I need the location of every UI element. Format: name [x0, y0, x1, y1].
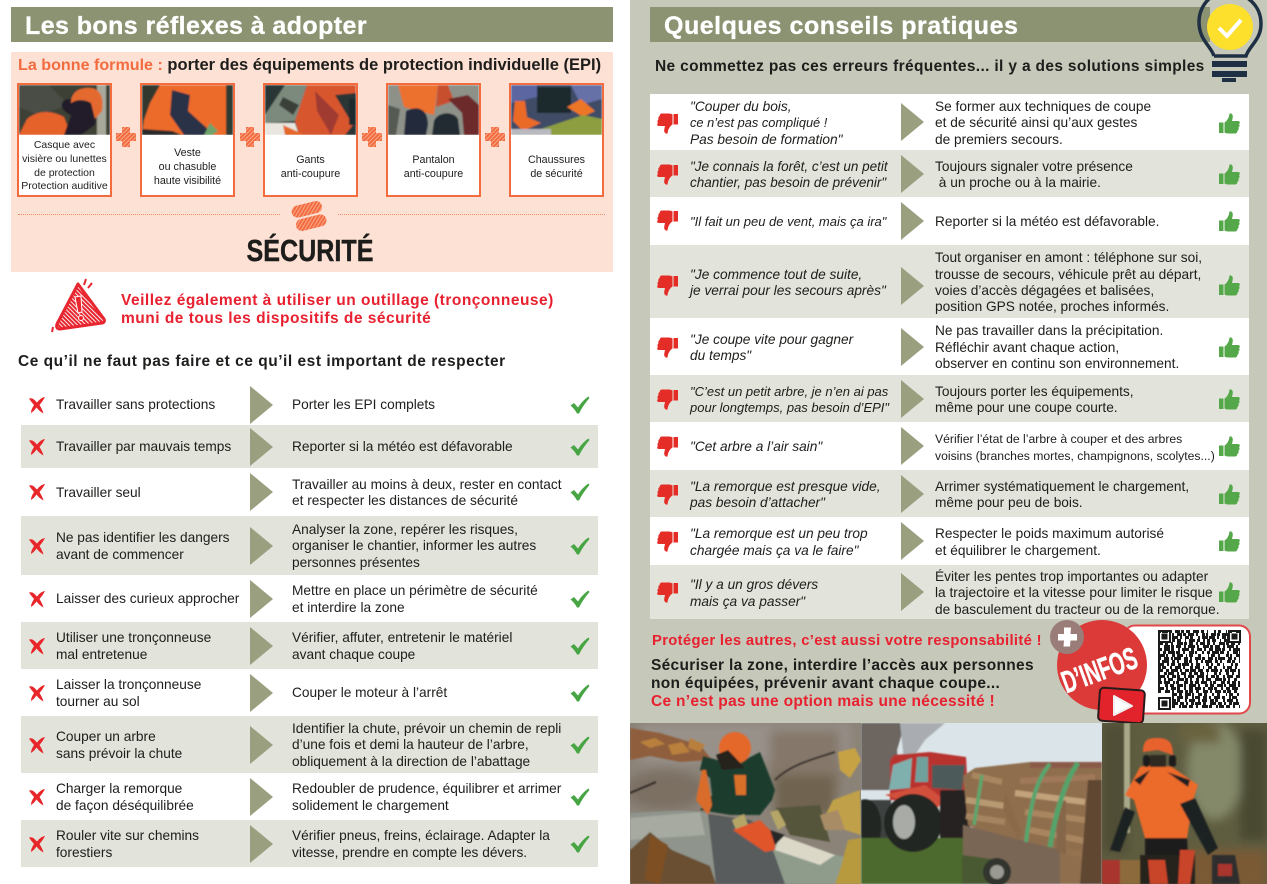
thumb up: [1219, 274, 1240, 296]
quote: mais ça va passer": [690, 594, 805, 608]
text block: sécuriser la zone: non équipées, prévenir avant chaque coupe...: [651, 675, 1000, 692]
caption: casque: [21, 139, 108, 192]
solution: Toujours signaler votre présence: [935, 159, 1133, 174]
plus 3: [362, 127, 382, 147]
caption: veste: ou chasuble: [159, 161, 216, 173]
quote: [690, 473, 881, 517]
quote: "Couper du bois,: [690, 99, 792, 114]
row 9: [21, 773, 598, 820]
thumb up: [1219, 484, 1240, 504]
callout: protéger les autres: Protéger les autres, c’est aussi votre responsabilité !: [652, 633, 1042, 649]
mistake: Laisser la tronçonneuse: [56, 677, 201, 692]
plus 2: [240, 127, 260, 147]
check: [570, 538, 590, 554]
row 8: [21, 716, 598, 773]
check: [570, 736, 590, 754]
thumb up: [1219, 164, 1240, 184]
mistake: Rouler vite sur chemins: [56, 828, 199, 843]
arrow: [901, 474, 924, 512]
mistake: Utiliser une tronçonneuse: [56, 630, 211, 645]
remedy: Analyser la zone, repérer les risques,: [292, 522, 518, 537]
remedy: Couper le moteur à l’arrêt: [292, 685, 447, 700]
photo: bûcheron à la tronçonneuse: [630, 723, 861, 884]
cross: [29, 439, 45, 456]
check: [570, 684, 590, 702]
arrow: [250, 626, 273, 664]
play button: [1098, 688, 1145, 724]
row 7: [21, 669, 598, 716]
solution: position GPS notée, proches informés.: [935, 299, 1169, 314]
advice 2: [650, 150, 1249, 197]
photo: chaussures: [511, 85, 602, 135]
solution: et de sécurité ainsi qu’aux gestes: [935, 115, 1137, 130]
cross: [28, 736, 46, 754]
thumb up: [1219, 336, 1240, 358]
solution: [935, 425, 1215, 470]
quote: "Il fait un peu de vent, mais ça ira": [690, 214, 886, 229]
row 1: [21, 385, 598, 425]
solution: Vérifier l’état de l’arbre à couper et des arbres: [935, 432, 1182, 446]
QR finder squares: [1159, 631, 1240, 709]
advice 3: [650, 197, 1249, 245]
remedy: [292, 718, 561, 773]
remedy: personnes présentes: [292, 555, 420, 570]
solution: même pour une coupe courte.: [935, 400, 1118, 415]
check: [570, 590, 590, 608]
row 6: [21, 622, 598, 669]
solution: [935, 473, 1189, 517]
caption: gants: anti-coupure: [281, 168, 340, 180]
remedy: solidement le chargement: [292, 798, 449, 812]
photo: tracteur et remorque de bois: [861, 723, 1102, 884]
heading: Quelques conseils pratiques: [650, 7, 1210, 42]
mistake: Couper un arbre: [56, 729, 156, 744]
plus sign: [1058, 628, 1077, 646]
quote: [690, 378, 889, 422]
row 4: [21, 516, 598, 575]
solution: Toujours porter les équipements,: [935, 384, 1134, 399]
text block: sécuriser la zone: Ce n’est pas une option mais une nécessité !: [651, 693, 995, 710]
caption: casque: Casque avec: [34, 139, 95, 151]
quote: [690, 520, 868, 565]
solution: Arrimer systématiquement le chargement,: [935, 479, 1189, 494]
mistake: mal entretenue: [56, 646, 147, 662]
caption: chaussures: [528, 154, 585, 180]
advice 1: [650, 94, 1249, 150]
caption: casque: de protection: [34, 166, 95, 178]
solution: Éviter les pentes trop importantes ou adapter: [935, 569, 1208, 584]
solution: voisins (branches mortes, champignons, scolytes...): [935, 448, 1215, 462]
quote: "Je connais la forêt, c’est un petit: [690, 159, 888, 174]
remedy: Mettre en place un périmètre de sécurité: [292, 583, 538, 598]
arrow: [250, 580, 273, 618]
quote: [690, 321, 853, 375]
advice 4: [650, 245, 1249, 318]
card: gants: [263, 83, 358, 197]
solution: [935, 153, 1133, 197]
remedy: [292, 775, 561, 820]
quote: [690, 97, 842, 150]
check: [570, 484, 590, 500]
panel: la bonne formule: [11, 52, 613, 272]
icon: warning triangle: [51, 278, 106, 332]
remedy: obliquement à la direction de l’abattage: [292, 754, 530, 769]
row 10: [21, 820, 598, 867]
callout: outillage: muni de tous les dispositifs de sécurité: [121, 310, 431, 327]
advice 9: [650, 517, 1249, 565]
remedy: Vérifier, affuter, entretenir le matériel: [292, 630, 512, 645]
cross: [29, 397, 45, 414]
thumb up: [1219, 113, 1240, 134]
caption: casque: visière ou lunettes: [22, 153, 107, 165]
arrow: [250, 726, 273, 764]
plus disc: [1050, 620, 1084, 654]
solution: la trajectoire et la vitesse pour limiter le risque: [935, 585, 1213, 600]
solution: Reporter si la météo est défavorable.: [935, 214, 1159, 229]
thumb down: [657, 582, 678, 603]
arrow: [901, 328, 924, 366]
mistake: [56, 822, 199, 867]
arrow: [250, 473, 273, 511]
arrow: [901, 202, 924, 240]
row 5: [21, 575, 598, 622]
photo: veste: [142, 85, 233, 135]
remedy: [292, 822, 550, 867]
icon: equals sign: [292, 201, 326, 231]
thumb down: [657, 210, 678, 231]
plus 1: [116, 127, 136, 147]
arrow: [901, 103, 924, 141]
row 3: [21, 468, 598, 516]
check: [570, 834, 590, 852]
photo: pantalon: [388, 85, 479, 135]
thumb down: [657, 164, 678, 184]
quote: "La remorque est un peu trop: [690, 526, 868, 541]
thumb down: [657, 531, 678, 552]
red circle: [1057, 620, 1147, 710]
mistake: Travailler sans protections: [56, 397, 215, 412]
caption: pantalon: Pantalon: [412, 154, 455, 166]
photo: bûcheron de dos: [1102, 723, 1267, 884]
solution: Tout organiser en amont : téléphone sur soi,: [935, 250, 1202, 265]
mistake: tourner au sol: [56, 694, 140, 708]
arrow: [901, 573, 924, 611]
arrow: [250, 386, 273, 424]
arrow: [250, 824, 273, 862]
caption: gants: [281, 154, 340, 180]
quote: pour longtemps, pas besoin d’EPI": [690, 400, 889, 415]
solution: trousse de secours, véhicule prêt au départ,: [935, 267, 1201, 282]
solution: Ne pas travailler dans la précipitation.: [935, 323, 1163, 338]
solution: observer en continu son environnement.: [935, 356, 1179, 371]
mistake: de façon déséquilibrée: [56, 798, 194, 812]
remedy: Travailler au moins à deux, rester en contact: [292, 477, 562, 492]
photo: gants: [265, 85, 356, 135]
arrow: [250, 428, 273, 466]
arrow: [250, 674, 273, 712]
mistake: [56, 775, 194, 820]
card: pantalon: [386, 83, 481, 197]
cross: [28, 834, 46, 852]
quote: ce n’est pas compliqué !: [690, 115, 827, 130]
mistake: forestiers: [56, 844, 112, 860]
solution: [935, 568, 1220, 619]
quote: Pas besoin de formation": [690, 132, 842, 147]
thumb down: [657, 388, 678, 410]
quote: "La remorque est presque vide,: [690, 479, 881, 494]
cross: [28, 788, 46, 806]
check: [570, 438, 590, 456]
D'INFOS label: D’INFOS: [1057, 640, 1142, 700]
thumb down: [657, 113, 678, 134]
remedy: Vérifier pneus, freins, éclairage. Adapter la: [292, 828, 550, 843]
remedy: Identifier la chute, prévoir un chemin de repli: [292, 721, 561, 736]
mistake: [56, 718, 182, 773]
caption: veste: Veste: [174, 147, 201, 159]
remedy: organiser le chantier, informer les autres: [292, 538, 536, 553]
arrow: [901, 380, 924, 418]
callout: outillage: [121, 292, 554, 327]
caption: veste: haute visibilité: [154, 175, 221, 187]
card: veste: [140, 83, 235, 197]
advice 8: [650, 470, 1249, 517]
remedy: [292, 583, 538, 614]
cross: [28, 684, 46, 702]
heading: la bonne formule: La bonne formule : porter des équipements de protection individuelle (EPI): [18, 56, 601, 74]
quote: "Il y a un gros dévers: [690, 577, 818, 592]
remedy: et interdire la zone: [292, 600, 405, 614]
check: [570, 636, 590, 654]
plus 4: [485, 127, 505, 147]
heading: Les bons réflexes à adopter: Les bons réflexes à adopter: [25, 12, 367, 40]
remedy: [292, 522, 536, 570]
quote: je verrai pour les secours après": [690, 283, 886, 298]
quote: chargée mais ça va le faire": [690, 542, 858, 558]
remedy: et respecter les distances de sécurité: [292, 493, 518, 508]
quote: [690, 568, 818, 619]
card: casque: [17, 83, 112, 197]
caption: chaussures: Chaussures: [528, 154, 585, 166]
thumb down: [657, 436, 678, 457]
remedy: avant chaque coupe: [292, 646, 415, 662]
remedy: Reporter si la météo est défavorable: [292, 439, 513, 454]
text block: sécuriser la zone: [651, 657, 1034, 711]
thumb up: [1219, 436, 1240, 457]
solution: [935, 321, 1179, 375]
thumb down: [657, 336, 678, 358]
caption: gants: Gants: [296, 154, 325, 166]
mistake: avant de commencer: [56, 546, 184, 562]
arrow: [901, 266, 924, 304]
remedy: vitesse, prendre en compte les dévers.: [292, 844, 527, 860]
mistake: Charger la remorque: [56, 781, 182, 796]
solution: à un proche ou à la mairie.: [939, 175, 1101, 190]
thumb up: [1219, 582, 1240, 603]
dotted line left: [18, 214, 280, 215]
text block: sécuriser la zone: Sécuriser la zone, interdire l’accès aux personnes: [651, 657, 1034, 674]
arrow: [901, 427, 924, 465]
mistake: Ne pas identifier les dangers: [56, 530, 229, 545]
thumb up: [1219, 388, 1240, 410]
mistake: sans prévoir la chute: [56, 746, 182, 760]
advice 5: [650, 318, 1249, 375]
check: [570, 396, 590, 414]
quote: chantier, pas besoin de prévenir": [690, 175, 886, 190]
right panel background: [630, 0, 1267, 884]
advice 6: [650, 375, 1249, 422]
solution: Réfléchir avant chaque action,: [935, 340, 1119, 355]
remedy: Porter les EPI complets: [292, 397, 435, 412]
quote: "Cet arbre a l’air sain": [690, 439, 822, 454]
caption: pantalon: anti-coupure: [404, 168, 463, 180]
solution: Se former aux techniques de coupe: [935, 99, 1151, 114]
advice 10: [650, 565, 1249, 619]
thumb up: [1219, 531, 1240, 552]
QR frame: [1124, 626, 1250, 714]
cross: [29, 591, 45, 608]
thumb down: [657, 484, 678, 504]
remedy: d’une fois et demi la hauteur de l’arbre,: [292, 737, 529, 752]
caption: pantalon: [404, 154, 463, 180]
mistake: [56, 630, 211, 662]
arrow: [901, 154, 924, 192]
arrow: [901, 522, 924, 560]
quote: [690, 248, 886, 318]
play triangle: [1114, 696, 1132, 715]
solution: de basculement du tracteur ou de la remorque.: [935, 602, 1220, 617]
caption: veste: [154, 147, 221, 187]
heading: erreurs fréquentes: Ne commettez pas ces erreurs fréquentes... il y a des solutions simples: [655, 58, 1205, 75]
heading: ce qu'il ne faut pas faire: Ce qu’il ne faut pas faire et ce qu’il est important de respecter: [18, 353, 506, 370]
mistake: [56, 671, 201, 716]
quote: pas besoin d’attacher": [690, 495, 825, 510]
cross: [29, 538, 45, 554]
mistake: Travailler seul: [56, 485, 141, 500]
solution: et équilibrer le chargement.: [935, 542, 1101, 558]
caption: casque: Protection auditive: [21, 180, 108, 192]
solution: [935, 378, 1134, 422]
quote: du temps": [690, 348, 751, 363]
card: chaussures: [509, 83, 604, 197]
dotted line right: [338, 214, 605, 215]
solution: [935, 520, 1164, 565]
solution: de premiers secours.: [935, 132, 1063, 147]
cross: [29, 484, 45, 500]
solution: même pour peu de bois.: [935, 495, 1083, 510]
check: [570, 788, 590, 806]
quote: "Je commence tout de suite,: [690, 267, 862, 282]
icon: light bulb: [1197, 0, 1267, 84]
QR code: [1158, 632, 1240, 706]
remedy: [292, 624, 512, 669]
arrow: [250, 527, 273, 565]
mistake: Laisser des curieux approcher: [56, 591, 239, 606]
callout: outillage: Veillez également à utiliser un outillage (tronçonneuse): [121, 292, 554, 309]
thumb down: [657, 274, 678, 296]
arrow: [250, 778, 273, 816]
solution: [935, 97, 1151, 150]
caption: chaussures: de sécurité: [530, 168, 583, 180]
quote: "C’est un petit arbre, je n’en ai pas: [690, 384, 888, 399]
cross: [29, 638, 45, 654]
quote: "Je coupe vite pour gagner: [690, 332, 853, 347]
solution: [935, 248, 1202, 318]
heading: Les bons réflexes à adopter: [11, 7, 613, 42]
heading: Quelques conseils pratiques: Quelques conseils pratiques: [664, 12, 1018, 40]
row 2: [21, 425, 598, 468]
badge: plus d'infos with QR code: [1045, 615, 1267, 727]
thumb up: [1219, 211, 1240, 232]
remedy: Redoubler de prudence, équilibrer et arrimer: [292, 781, 561, 796]
solution: Respecter le poids maximum autorisé: [935, 526, 1164, 541]
advice 7: [650, 422, 1249, 470]
mistake: [56, 530, 229, 562]
remedy: [292, 477, 562, 508]
quote: [690, 153, 888, 197]
mistake: Travailler par mauvais temps: [56, 439, 231, 454]
photo: casque: [19, 85, 110, 135]
solution: voies d’accès dégagées et balisées,: [935, 283, 1154, 298]
